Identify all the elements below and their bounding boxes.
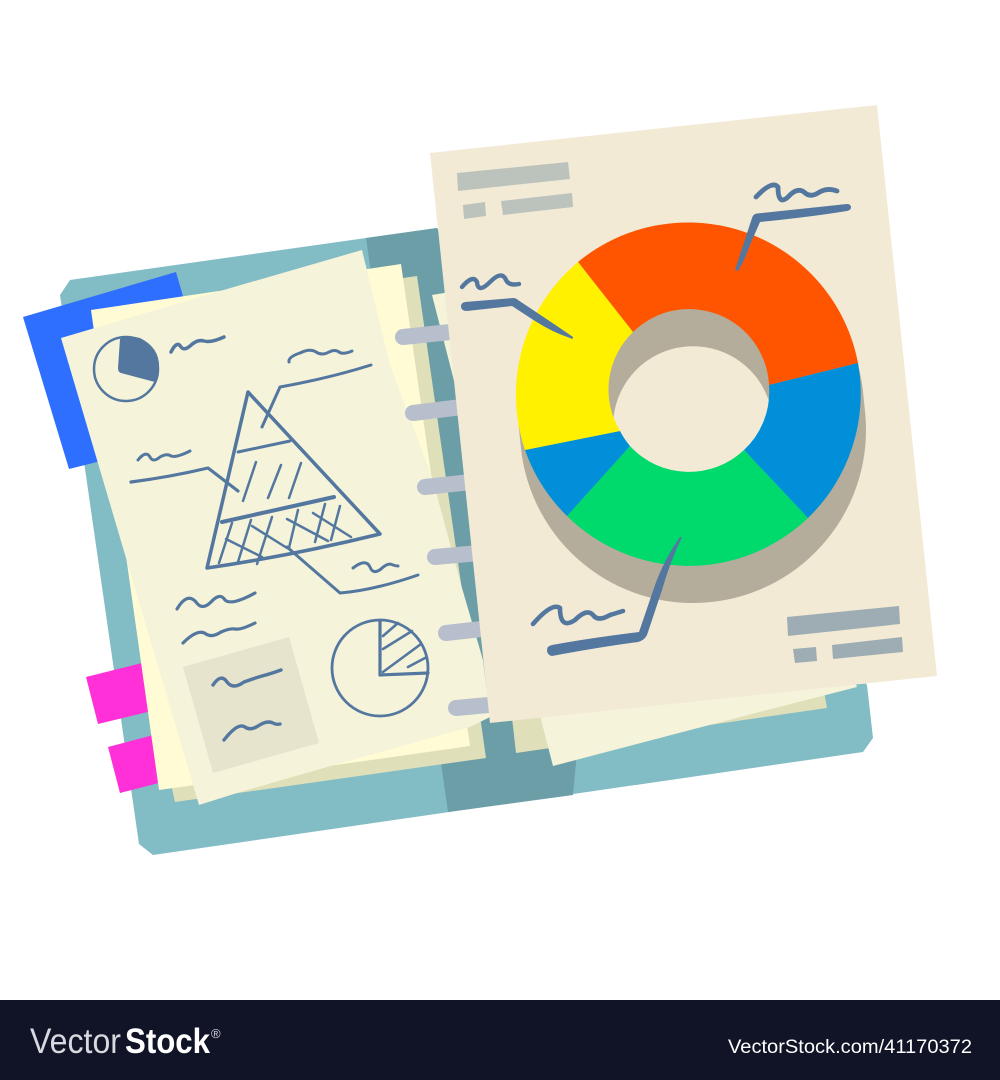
grey note box (183, 637, 319, 773)
right page back sheet (510, 680, 827, 753)
pink tab lower (108, 730, 178, 793)
pyramid chart (207, 392, 380, 568)
logo wordmark: ® (211, 1026, 221, 1041)
notebook spine (366, 228, 600, 812)
left front sheet with sketches (61, 250, 490, 805)
blue corner bookmark (23, 272, 200, 469)
callout top left (461, 275, 573, 339)
large pie chart with hatching (332, 620, 428, 716)
footer bar (0, 1000, 1000, 1080)
donut chart (516, 222, 861, 566)
right paper with donut chart (430, 105, 937, 723)
callout bottom (533, 537, 682, 656)
logo wordmark: Vector (30, 1022, 121, 1061)
logo wordmark: Stock (125, 1022, 210, 1061)
pink tab upper (86, 658, 168, 724)
yellow segment (516, 262, 633, 450)
binder rings (403, 331, 510, 708)
callout top right (735, 185, 851, 271)
scribbles and leader lines (131, 337, 418, 740)
small pie chart (94, 337, 159, 401)
right blue segment (744, 363, 861, 518)
left page back sheet (170, 276, 486, 802)
footer placeholder bars (787, 606, 903, 663)
left page middle sheet (91, 264, 470, 790)
header placeholder bars (457, 162, 573, 219)
logo wordmark (30, 1022, 221, 1061)
left blue segment (525, 431, 630, 516)
image id text: VectorStock.com/41170372 (728, 1036, 972, 1058)
green segment (567, 446, 808, 566)
orange segment (578, 222, 858, 385)
right page front sheet (432, 250, 857, 766)
notebook cover (60, 228, 873, 855)
